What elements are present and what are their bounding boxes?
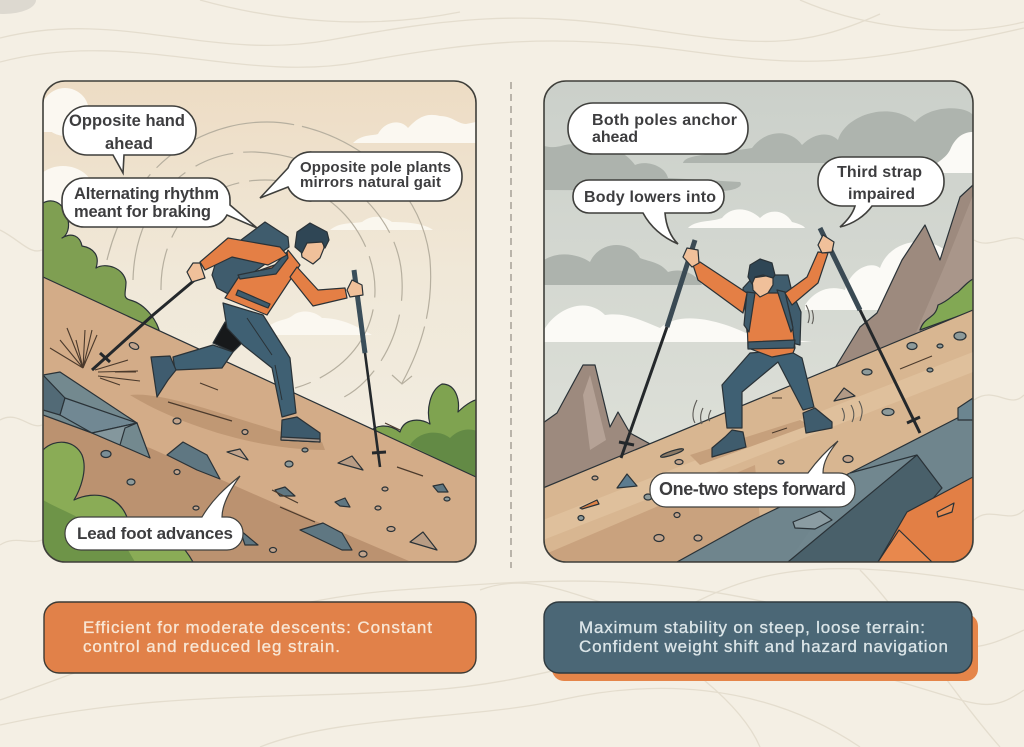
hiker: descending with alternating poles xyxy=(92,222,386,467)
grey and white clouds xyxy=(544,108,973,342)
chest strap xyxy=(238,252,288,279)
bush: upper left xyxy=(43,201,160,334)
callout: one-two steps xyxy=(650,441,855,507)
right pole xyxy=(364,352,382,468)
lower dirt band xyxy=(44,416,409,562)
panel: simultaneous pole technique xyxy=(543,81,975,562)
rock: large xyxy=(43,372,150,458)
hiker: bracing with both poles xyxy=(619,228,920,458)
torso xyxy=(747,293,795,357)
torso xyxy=(225,250,300,315)
motion arcs xyxy=(107,122,431,398)
callout: alternating rhythm: meant for braking xyxy=(74,203,211,221)
slope terrain xyxy=(543,310,973,562)
bush: right xyxy=(920,278,975,330)
back leg xyxy=(173,345,233,370)
clouds xyxy=(33,88,476,335)
waist strap xyxy=(236,290,270,308)
callout: both poles xyxy=(568,103,748,154)
caption: orange benefit box: control and reduced leg strain. xyxy=(83,637,340,656)
callout: opposite hand xyxy=(63,106,196,173)
motion marks xyxy=(693,305,862,424)
rock slab xyxy=(677,410,973,562)
front foot xyxy=(281,417,320,442)
belt xyxy=(748,340,795,349)
caption: orange benefit box xyxy=(44,602,476,673)
boots xyxy=(712,430,746,457)
front leg xyxy=(223,303,296,417)
small stones xyxy=(578,332,973,542)
callout: lead foot: Lead foot advances xyxy=(77,524,233,543)
callout: both poles: Both poles anchor xyxy=(592,112,737,129)
caption: blue benefit box: Confident weight shift and hazard navigation xyxy=(579,637,948,656)
rear arm xyxy=(200,238,287,270)
callout: both poles: ahead xyxy=(592,129,638,146)
front arm xyxy=(290,267,347,306)
divider xyxy=(510,82,512,568)
callout: opposite pole: Opposite pole plants xyxy=(300,159,451,176)
impact sparks xyxy=(50,328,140,385)
left arm xyxy=(693,262,747,313)
mountains: left xyxy=(543,365,652,488)
callout: alternating rhythm: Alternating rhythm xyxy=(74,185,219,203)
shoulder straps xyxy=(744,290,793,332)
callout: body lowers xyxy=(573,180,724,244)
panel: alternating pole technique xyxy=(33,81,480,570)
left pole xyxy=(667,240,695,327)
legs xyxy=(722,350,814,428)
callout: opposite pole xyxy=(260,152,462,201)
right arm xyxy=(785,252,828,305)
callout: third strap xyxy=(818,157,944,227)
dirt shading bands xyxy=(543,352,973,540)
mountains: right xyxy=(835,185,973,368)
callout: one-two steps: One-two steps forward xyxy=(659,479,846,499)
head xyxy=(300,242,324,265)
caption: blue benefit box: Maximum stability on steep, loose terrain: xyxy=(579,618,925,637)
callout: opposite hand: ahead xyxy=(105,135,153,153)
callout: body lowers: Body lowers into xyxy=(584,189,716,206)
right pole xyxy=(820,228,860,310)
callout: opposite hand: Opposite hand xyxy=(69,112,185,130)
hands xyxy=(187,263,205,282)
hands xyxy=(683,248,699,267)
caption: orange benefit box: Efficient for moderate descents: Constant xyxy=(83,618,432,637)
callout: alternating rhythm xyxy=(62,178,257,228)
left pole xyxy=(92,278,197,370)
bush: lower left xyxy=(43,442,193,562)
callout: third strap: impaired xyxy=(848,186,915,203)
back foot xyxy=(151,356,176,397)
callout: opposite pole: mirrors natural gait xyxy=(300,174,441,191)
callout: third strap: Third strap xyxy=(837,164,922,181)
rocks: scattered xyxy=(101,341,450,557)
head xyxy=(752,275,773,297)
rock: orange xyxy=(878,477,973,562)
slope terrain xyxy=(43,277,476,562)
backpack xyxy=(743,275,801,345)
caption: blue benefit box xyxy=(544,602,978,681)
bush: right xyxy=(372,383,476,460)
callout: lead foot xyxy=(65,476,243,550)
backpack xyxy=(212,222,289,295)
